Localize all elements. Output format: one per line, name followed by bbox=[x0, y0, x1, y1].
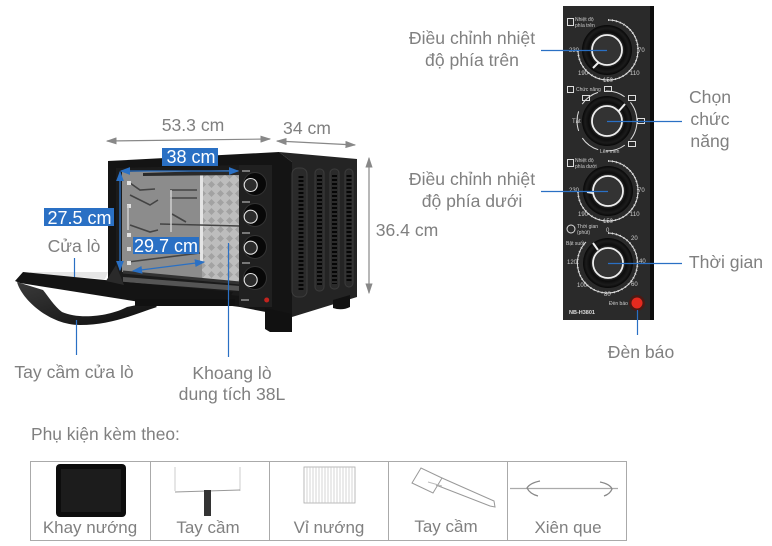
inner depth 29.7 cm bbox=[133, 236, 204, 271]
dimension: depth 34 cm bbox=[277, 118, 355, 145]
label: oven door: Cửa lò bbox=[48, 236, 101, 256]
accessory: baking tray: Khay nướng bbox=[43, 518, 137, 537]
knob: timer bbox=[566, 224, 646, 298]
knob: bottom heat bbox=[568, 158, 645, 225]
dimension: depth 34 cm: 34 cm bbox=[283, 118, 331, 138]
indicator light bbox=[609, 295, 645, 311]
knob: bottom heat: 230 bbox=[569, 188, 580, 194]
oven side vents bbox=[292, 168, 353, 297]
knob: top heat: 230 bbox=[569, 48, 580, 54]
oven cavity bbox=[116, 165, 240, 296]
knob: timer: 0 bbox=[606, 228, 610, 234]
dimension: height 36.4 cm bbox=[369, 158, 438, 293]
knob: top heat: 110 bbox=[630, 71, 640, 77]
knob: timer: Thời gian bbox=[577, 224, 598, 230]
inner width 38 cm: 38 cm bbox=[166, 147, 216, 167]
accessory: baking tray bbox=[43, 464, 137, 537]
callout: bottom heat bbox=[409, 169, 608, 211]
accessory: wire rack: Vỉ nướng bbox=[294, 518, 364, 537]
callout: function: Chọn bbox=[689, 87, 731, 107]
accessory: rack handle bbox=[412, 468, 495, 536]
knob: bottom heat: 70 bbox=[638, 188, 645, 194]
oven feet bbox=[265, 308, 292, 332]
knob: top heat: 150 bbox=[603, 78, 614, 84]
control panel bbox=[239, 165, 272, 307]
model number: NB-H3801 bbox=[569, 310, 595, 316]
dimension: width 53.3 cm: 53.3 cm bbox=[162, 115, 224, 135]
accessories table bbox=[30, 461, 626, 541]
knob: bottom heat: 190 bbox=[578, 212, 589, 218]
callout: top heat: độ phía trên bbox=[425, 50, 519, 70]
accessory: tray handle bbox=[175, 467, 240, 537]
inner width 38 cm bbox=[121, 147, 238, 171]
accessory: wire rack bbox=[294, 467, 364, 537]
knob: top heat: 70 bbox=[638, 48, 645, 54]
oven door with handle bbox=[15, 265, 235, 325]
label: cavity capacity: dung tích 38L bbox=[179, 384, 286, 404]
label: door handle bbox=[14, 320, 134, 382]
callout: top heat: Điều chỉnh nhiệt bbox=[409, 28, 535, 48]
knob: function: Chức năng bbox=[576, 87, 601, 93]
knob: top heat bbox=[568, 17, 645, 84]
label: cavity capacity bbox=[179, 243, 286, 404]
callout: top heat bbox=[409, 28, 607, 70]
accessory: rotisserie spit: Xiên que bbox=[534, 518, 602, 537]
callout: indicator bbox=[608, 310, 674, 362]
knob: top heat: Nhiệt độ bbox=[575, 17, 594, 23]
inner height 27.5 cm bbox=[44, 172, 120, 270]
accessory: tray handle: Tay cầm bbox=[176, 518, 240, 537]
label: oven door bbox=[48, 236, 101, 277]
oven front frame bbox=[108, 152, 292, 317]
knob: top heat: 190 bbox=[578, 71, 589, 77]
control panel enlarged bbox=[563, 6, 654, 320]
knob: timer: 40 bbox=[639, 259, 646, 265]
callout: indicator: Đèn báo bbox=[608, 342, 674, 362]
knob: timer: (phút) bbox=[577, 230, 590, 236]
accessory: rack handle: Tay cầm bbox=[414, 517, 478, 536]
knob: timer: Bật suốt bbox=[566, 241, 585, 247]
label: door handle: Tay cầm cửa lò bbox=[14, 362, 134, 382]
callout: function bbox=[607, 87, 731, 151]
callout: bottom heat: Điều chỉnh nhiệt bbox=[409, 169, 535, 189]
callout: function: năng bbox=[690, 131, 730, 151]
knob: bottom heat: phía dưới bbox=[575, 164, 597, 170]
oven illustration bbox=[15, 152, 357, 332]
knob: function: Lên men bbox=[600, 149, 620, 155]
knob: function: Tắt bbox=[572, 118, 581, 125]
knob: function bbox=[568, 86, 644, 155]
accessory: rotisserie spit bbox=[510, 481, 618, 537]
inner height 27.5 cm: 27.5 cm bbox=[47, 208, 112, 228]
knob: timer: 60 bbox=[631, 282, 638, 288]
callout: function: chức bbox=[690, 109, 730, 129]
callout: bottom heat: độ phía dưới bbox=[422, 191, 522, 211]
accessories heading: Phụ kiện kèm theo: bbox=[31, 424, 180, 444]
knob: bottom heat: 150 bbox=[603, 219, 614, 225]
knob: bottom heat: 110 bbox=[630, 212, 640, 218]
indicator light: Đèn báo bbox=[609, 301, 628, 307]
inner depth 29.7 cm: 29.7 cm bbox=[134, 236, 198, 256]
knob: timer: 20 bbox=[631, 236, 638, 242]
knob: timer: 80 bbox=[604, 292, 611, 298]
label: cavity capacity: Khoang lò bbox=[192, 363, 272, 383]
knob: timer: 120 bbox=[567, 260, 578, 266]
oven side panel bbox=[279, 152, 357, 317]
callout: timer: Thời gian bbox=[689, 252, 763, 272]
knob: bottom heat: Nhiệt độ bbox=[575, 158, 594, 164]
knob: timer: 100 bbox=[577, 283, 588, 289]
knob: top heat: phía trên bbox=[575, 23, 595, 29]
dimension: height 36.4 cm: 36.4 cm bbox=[376, 220, 438, 240]
